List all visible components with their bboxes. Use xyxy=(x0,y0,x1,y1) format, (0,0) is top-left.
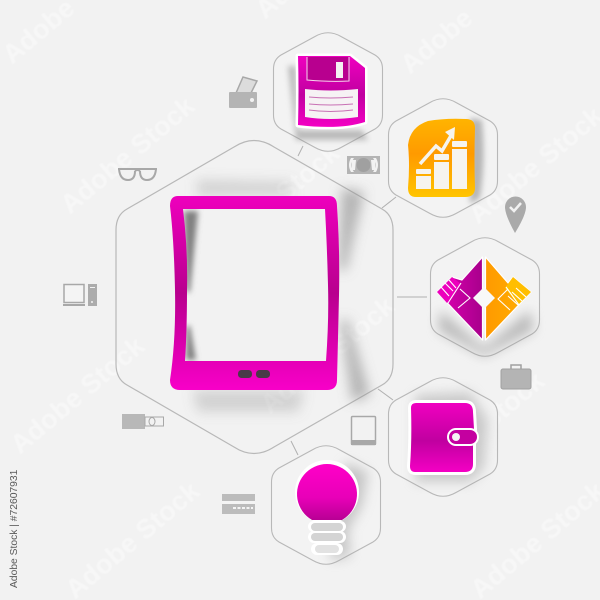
credit text: Adobe Stock | #72607931 xyxy=(9,469,20,588)
icon: map pin xyxy=(505,197,526,233)
icon: glasses xyxy=(118,169,157,180)
icon: wallet with money xyxy=(229,77,257,108)
icon: floppy disk xyxy=(288,56,368,140)
watermark: Adobe Stock xyxy=(55,90,201,220)
panel: bulb hexagon xyxy=(272,446,380,564)
icon: credit card xyxy=(222,494,255,514)
panel: floppy hexagon xyxy=(274,33,382,151)
icon: growth chart xyxy=(408,118,484,204)
icon: wallet xyxy=(410,392,488,482)
icon: tablet xyxy=(170,196,339,390)
panel: hands hexagon xyxy=(430,238,540,356)
icon: joined hands xyxy=(437,257,534,356)
icon: banknote xyxy=(347,156,380,174)
connector arrows xyxy=(291,146,427,455)
icon: briefcase xyxy=(501,365,531,389)
watermark: Adobe Stock xyxy=(255,290,401,420)
icon: light bulb xyxy=(295,460,368,560)
icon: small tablet xyxy=(351,416,376,445)
watermark: Adobe Stock xyxy=(5,330,151,460)
tablet shadows xyxy=(192,180,370,412)
watermark: Adobe xyxy=(395,3,478,80)
inner screen shadow xyxy=(184,211,198,360)
panel: central hexagon xyxy=(116,140,393,454)
watermark: Adobe Stock xyxy=(405,365,551,495)
icon: money stack xyxy=(122,414,164,429)
panel: chart hexagon xyxy=(388,99,498,217)
icon: desktop computer xyxy=(63,284,97,306)
watermark: Adobe Stock xyxy=(200,137,346,267)
panel: wallet hexagon xyxy=(388,378,498,496)
tablet buttons xyxy=(238,370,270,378)
